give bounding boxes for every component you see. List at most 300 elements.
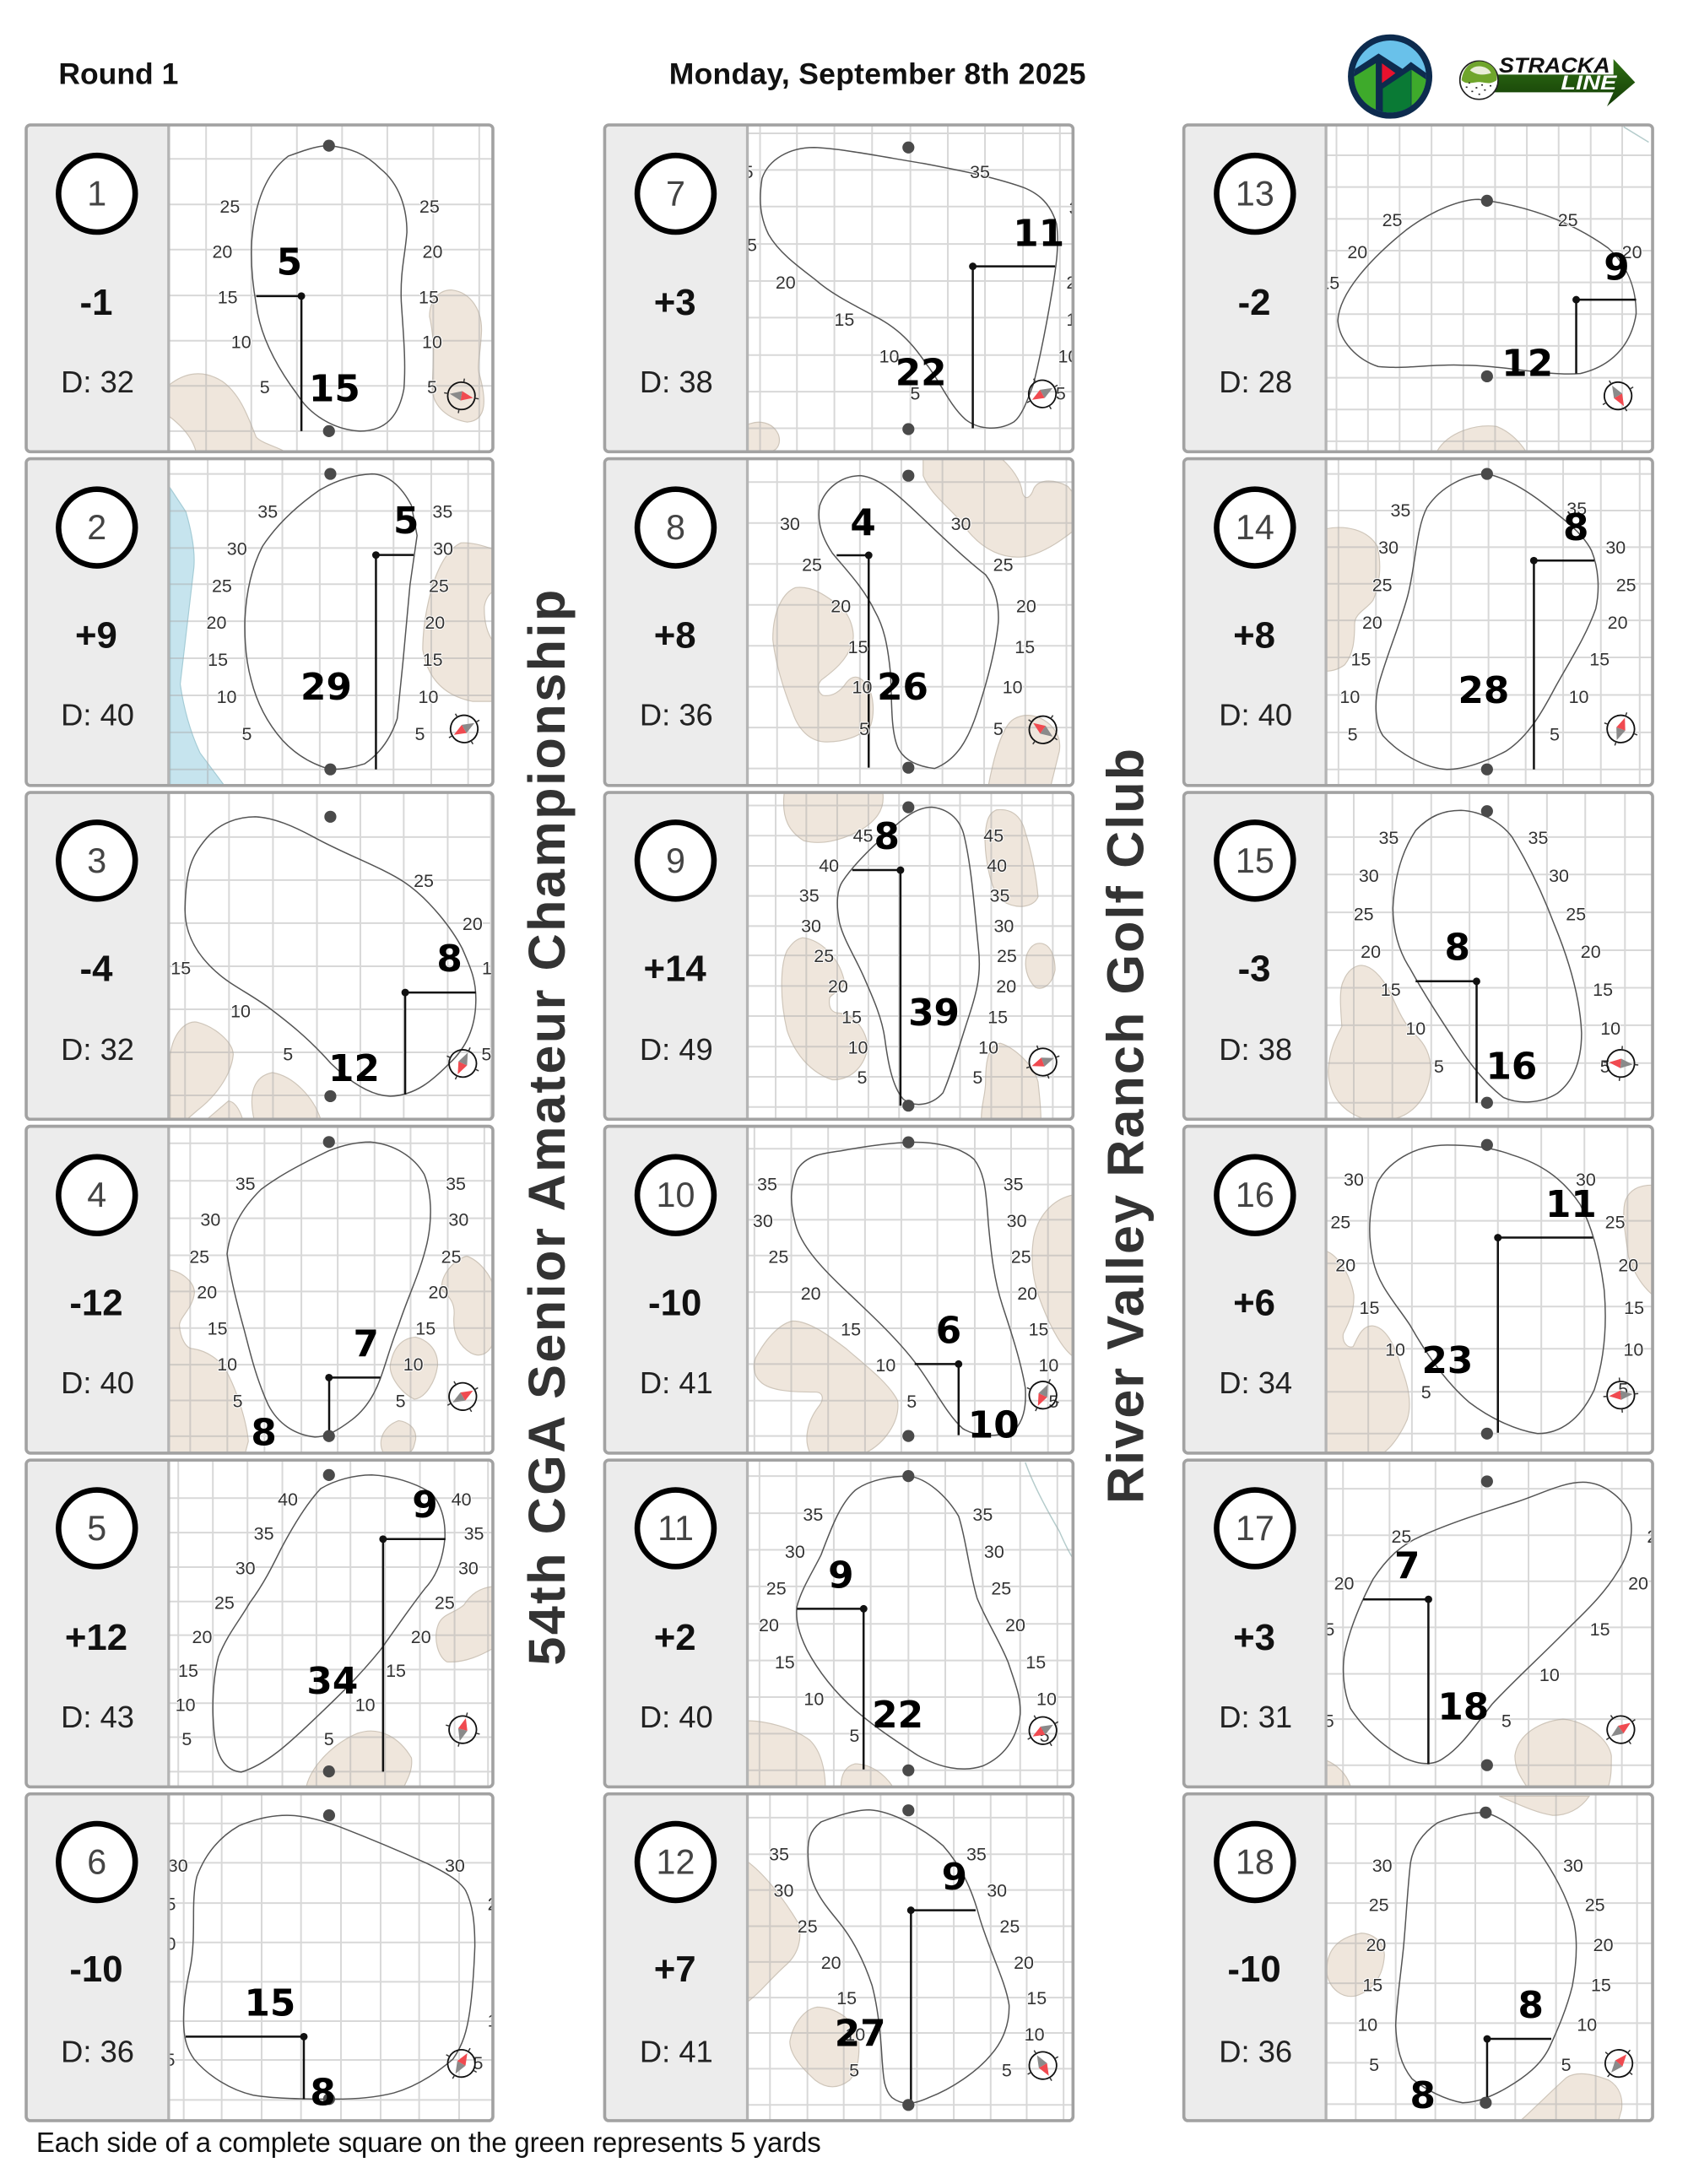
hole number 12: [637, 1824, 714, 1900]
yardage labels: 25: [991, 1578, 1011, 1598]
yardage labels: 5: [1040, 1726, 1050, 1746]
compass: [449, 713, 479, 744]
depth: D: 41: [640, 1365, 713, 1400]
yardage labels: 20: [1622, 242, 1642, 262]
hole number 15: [1216, 822, 1293, 899]
pins and hole location: [1480, 1807, 1491, 2109]
depth: D: 36: [61, 2035, 134, 2069]
yardage labels: 15: [170, 959, 191, 979]
yardage labels: 5: [165, 2050, 176, 2070]
yardage labels: 15: [1014, 637, 1035, 657]
green map: [744, 1121, 1079, 1457]
pins and hole location: [902, 142, 977, 435]
score: +12: [65, 1617, 127, 1658]
distance numbers: 7: [353, 1323, 379, 1366]
logo: Stracka Line arrow: LINE: [1561, 72, 1618, 95]
compass: [446, 1047, 479, 1080]
yardage labels: 25: [441, 1247, 462, 1268]
yardage labels: 40: [987, 856, 1007, 876]
yardage labels: 25: [993, 555, 1014, 576]
yardage labels: 30: [1069, 198, 1090, 219]
yardage labels: 25: [1372, 575, 1393, 595]
yardage labels: 20: [1014, 1953, 1034, 1973]
yardage labels: 10: [176, 1695, 196, 1716]
depth: D: 41: [640, 2035, 713, 2069]
yardage labels: 15: [834, 310, 854, 330]
yardage labels: 35: [733, 162, 754, 182]
distance numbers: 18: [1437, 1686, 1489, 1729]
hole number 7: 7: [666, 175, 685, 214]
yardage labels: 35: [970, 162, 990, 182]
yardage labels: 5: [1421, 1382, 1431, 1403]
green map: [1325, 787, 1657, 1123]
yardage labels: 5: [849, 1726, 859, 1746]
distance numbers: 22: [872, 1694, 923, 1737]
yardage labels: 25: [1566, 905, 1586, 925]
yardage labels: 10: [1339, 687, 1360, 707]
compass: [1602, 1045, 1640, 1083]
distance numbers: 5: [393, 500, 419, 543]
yardage labels: 10: [230, 1002, 251, 1022]
yardage labels: 20: [197, 1282, 217, 1302]
yardage labels: 45: [983, 825, 1004, 846]
yardage labels: 30: [774, 1881, 793, 1901]
yardage labels: 15: [178, 1661, 198, 1681]
hole number 18: 18: [1236, 1842, 1274, 1881]
green map: [744, 1792, 1079, 2123]
hole number 5: [58, 1490, 135, 1566]
yardage labels: 30: [227, 538, 247, 559]
yardage labels: 30: [1378, 538, 1399, 558]
yardage labels: 35: [446, 1174, 466, 1194]
distance numbers: 15: [309, 367, 360, 410]
yardage labels: 35: [990, 886, 1009, 906]
pins and hole location: [1481, 195, 1580, 382]
distance numbers: [1394, 1545, 1489, 1729]
yardage labels: 20: [1628, 1573, 1648, 1593]
yardage labels: 35: [803, 1505, 823, 1525]
distance numbers: [279, 248, 358, 402]
distance numbers: 16: [1485, 1045, 1537, 1088]
hole number 14: [1216, 489, 1293, 566]
yardage labels: 30: [168, 1856, 188, 1876]
score: -4: [80, 948, 113, 989]
yardage labels: 15: [1591, 1975, 1611, 1995]
green map: [165, 1122, 496, 1458]
yardage labels: 25: [766, 1578, 787, 1598]
yardage labels: 25: [768, 1247, 788, 1268]
score: +6: [1233, 1283, 1275, 1324]
yardage labels: 10: [879, 346, 900, 366]
compass: [1594, 2039, 1643, 2088]
score: -10: [648, 1283, 701, 1324]
hole number 17: 17: [1236, 1509, 1274, 1548]
yardage labels: 30: [433, 538, 453, 559]
yardage labels: 15: [1590, 1619, 1610, 1640]
yardage labels: 15: [482, 959, 502, 979]
yardage labels: 15: [841, 1008, 862, 1028]
yardage labels: 10: [422, 332, 442, 352]
yardage labels: 10: [403, 1354, 424, 1375]
yardage labels: 35: [799, 886, 820, 906]
compass: [447, 1381, 479, 1413]
pins and hole location: [860, 1470, 914, 1776]
yardage labels: 15: [1026, 1988, 1047, 2008]
distance numbers: 27: [835, 2013, 886, 2056]
distance numbers: 8: [310, 2072, 336, 2115]
panel: hole 17: [1184, 1454, 1667, 1790]
yardage labels: [1354, 828, 1620, 1077]
compass: [1596, 1706, 1645, 1754]
yardage labels: 15: [841, 1320, 861, 1340]
yardage labels: 30: [458, 1558, 479, 1578]
panel: hole 3: [26, 792, 502, 1123]
yardage labels: 10: [355, 1695, 376, 1716]
yardage labels: 20: [776, 273, 796, 293]
yardage labels: 30: [445, 1856, 465, 1876]
green map: [166, 792, 502, 1123]
yardage labels: 25: [1369, 1895, 1389, 1916]
yardage labels: 35: [1391, 500, 1410, 521]
yardage labels: 20: [463, 914, 483, 934]
panel: hole 15: [1184, 787, 1657, 1123]
distance numbers: 6: [936, 1310, 961, 1353]
yardage labels: 20: [1066, 273, 1086, 293]
green map: [166, 456, 498, 792]
yardage labels: 20: [1005, 1615, 1025, 1635]
pins and hole location: [323, 1469, 387, 1777]
yardage labels: 5: [859, 719, 869, 739]
vertical title: golf club: River Valley Ranch Golf Club: [1097, 749, 1155, 1504]
yardage labels: 10: [852, 678, 872, 698]
distance numbers: 8: [1563, 506, 1588, 549]
yardage labels: 25: [212, 576, 232, 596]
pins and hole location: [1481, 1139, 1501, 1440]
distance numbers: [895, 212, 1064, 395]
yardage labels: 25: [419, 197, 440, 217]
yardage labels: 30: [753, 1211, 773, 1231]
yardage labels: [1357, 1856, 1614, 2075]
distance numbers: [936, 1310, 1020, 1446]
hole number 13: 13: [1236, 175, 1274, 214]
yardage labels: 10: [1539, 1665, 1560, 1685]
yardage labels: 30: [1605, 538, 1626, 558]
panel: hole 14: [1184, 456, 1657, 792]
yardage labels: 5: [414, 724, 425, 744]
yardage labels: 25: [214, 1592, 235, 1613]
yardage labels: 5: [993, 719, 1004, 739]
distance numbers: [874, 815, 960, 1035]
green map: [744, 1456, 1079, 1792]
yardage labels: 15: [1315, 1619, 1334, 1640]
yardage labels: 35: [1004, 1175, 1024, 1195]
distance numbers: 34: [306, 1660, 358, 1703]
hole number 8: 8: [666, 508, 685, 547]
yardage labels: 15: [1589, 650, 1610, 670]
panel: hole 4: [26, 1122, 496, 1458]
yardage labels: 15: [1624, 1298, 1644, 1318]
hole number 9: [637, 822, 714, 899]
yardage labels: [170, 1858, 491, 2069]
yardage labels: 30: [987, 1881, 1007, 1901]
yardage labels: 20: [759, 1615, 779, 1635]
yardage labels: 25: [488, 1895, 508, 1915]
score: +14: [644, 948, 706, 989]
yardage labels: 40: [819, 856, 839, 876]
yardage labels: 30: [780, 514, 800, 534]
depth: D: 40: [61, 698, 134, 733]
yardage labels: [799, 825, 1017, 1088]
depth: D: 40: [640, 1700, 713, 1734]
yardage labels: 10: [1036, 1689, 1057, 1710]
hole number 16: [1216, 1157, 1293, 1234]
green map: [1315, 1454, 1667, 1790]
distance numbers: [850, 501, 928, 709]
yardage labels: 30: [1359, 866, 1379, 886]
hole number 12: 12: [657, 1842, 695, 1881]
yardage labels: 25: [1382, 210, 1403, 230]
distance numbers: 15: [244, 1982, 295, 2025]
yardage labels: 15: [1381, 980, 1401, 1000]
yardage labels: 35: [972, 1505, 993, 1525]
yardage labels: 20: [1347, 242, 1367, 262]
yardage labels: 10: [1039, 1355, 1058, 1376]
green map: [170, 1796, 491, 2120]
distance numbers: [1444, 927, 1537, 1088]
depth: D: 40: [61, 1365, 134, 1400]
yardage labels: 35: [257, 502, 278, 522]
yardage labels: 30: [448, 1210, 468, 1230]
green map: [165, 121, 494, 452]
pins and hole location: [865, 470, 914, 774]
distance numbers: 8: [1518, 1984, 1544, 2027]
distance numbers: 29: [300, 666, 352, 709]
yardage labels: 25: [1011, 1247, 1031, 1268]
yardage labels: 20: [207, 613, 226, 633]
yardage labels: 15: [1350, 650, 1371, 670]
distance numbers: [309, 1490, 436, 1695]
yardage labels: 30: [235, 1558, 256, 1578]
distance numbers: [333, 943, 461, 1081]
yardage labels: 10: [848, 1037, 868, 1057]
panel: hole 9: [604, 789, 1079, 1125]
yardage labels: 25: [802, 555, 822, 576]
compass: [1019, 705, 1068, 754]
hole number 1: 1: [87, 175, 106, 214]
yardage labels: 5: [1324, 1711, 1334, 1732]
compass: [1020, 1372, 1066, 1419]
yardage labels: 20: [1362, 613, 1382, 633]
logo: Stracka Line arrow: [1460, 54, 1635, 106]
yardage labels: 15: [1066, 310, 1086, 330]
yardage labels: 5: [1348, 724, 1358, 744]
green map: [1325, 456, 1657, 792]
distance numbers: [1458, 506, 1588, 712]
distance numbers: [1422, 1183, 1597, 1382]
yardage labels: 30: [1563, 1856, 1583, 1876]
yardage labels: 5: [849, 2060, 859, 2080]
yardage labels: 15: [208, 1318, 228, 1338]
yardage labels: 35: [464, 1524, 484, 1544]
yardage labels: 20: [996, 976, 1016, 997]
hole number 11: 11: [657, 1509, 694, 1548]
yardage labels: 30: [1344, 1170, 1364, 1190]
distance numbers: 8: [1409, 2074, 1436, 2117]
yardage labels: 25: [1558, 210, 1578, 230]
yardage labels: 30: [984, 1542, 1004, 1562]
panel: hole 8: [604, 454, 1079, 790]
yardage labels: [759, 1505, 1057, 1746]
yardage labels: 5: [260, 377, 270, 397]
yardage labels: 45: [853, 825, 874, 846]
score: -10: [1227, 1949, 1281, 1990]
yardage labels: 10: [978, 1037, 998, 1057]
yardage labels: 5: [242, 724, 252, 744]
score: -1: [80, 282, 112, 323]
yardage labels: 5: [1434, 1057, 1444, 1077]
yardage labels: 5: [324, 1729, 334, 1749]
yardage labels: 35: [966, 1845, 987, 1865]
distance numbers: [303, 506, 417, 700]
yardage labels: 25: [414, 871, 434, 891]
hole number 7: [637, 155, 714, 232]
yardage labels: 25: [219, 197, 240, 217]
yardage labels: 20: [801, 1284, 821, 1304]
score: +9: [75, 615, 117, 657]
yardage labels: 20: [1593, 1935, 1614, 1955]
yardage labels: 25: [997, 946, 1017, 966]
yardage labels: 10: [1025, 2025, 1045, 2045]
score: +8: [1233, 615, 1275, 657]
hole number 14: 14: [1236, 508, 1274, 547]
hole number 17: [1216, 1490, 1293, 1566]
green map: [749, 127, 1072, 451]
depth: D: 49: [640, 1032, 713, 1067]
yardage labels: 30: [1007, 1211, 1027, 1231]
yardage labels: 15: [1360, 1298, 1379, 1318]
yardage labels: 5: [1002, 2060, 1012, 2080]
yardage labels: 15: [423, 650, 443, 670]
yardage labels: 5: [1600, 1057, 1610, 1077]
yardage labels: 5: [1369, 2055, 1379, 2075]
depth: D: 32: [61, 365, 134, 399]
yardage labels: 20: [1335, 1256, 1355, 1276]
distance numbers: [1409, 1984, 1544, 2117]
yardage labels: 35: [432, 502, 452, 522]
distance numbers: 22: [895, 352, 947, 395]
yardage labels: 10: [419, 687, 439, 707]
yardage labels: 5: [283, 1045, 293, 1065]
hole number 4: 4: [87, 1176, 106, 1214]
yardage labels: 25: [156, 1895, 176, 1915]
yardage labels: 25: [429, 576, 449, 596]
score: -2: [1238, 282, 1270, 323]
yardage labels: 5: [473, 2053, 484, 2073]
panel: hole 10: [604, 1121, 1079, 1457]
compass: [446, 2047, 477, 2079]
distance numbers: 23: [1422, 1339, 1473, 1382]
yardage labels: 35: [757, 1175, 777, 1195]
logo: River Valley Ranch mountain badge: [1348, 35, 1433, 119]
distance numbers: 8: [251, 1411, 277, 1454]
hole number 11: [637, 1490, 714, 1566]
yardage labels: 35: [235, 1174, 256, 1194]
yardage labels: [1315, 1527, 1667, 1732]
yardage labels: 10: [217, 1354, 237, 1375]
yardage labels: 30: [1576, 1170, 1596, 1190]
yardage labels: 15: [419, 288, 439, 308]
yardage labels: 15: [218, 288, 238, 308]
green map: [165, 1458, 496, 1790]
hole number 5: 5: [87, 1509, 106, 1548]
depth: D: 34: [1219, 1365, 1292, 1400]
hole number 15: 15: [1236, 841, 1274, 880]
panel: hole 2: [26, 456, 498, 792]
depth: D: 40: [1219, 698, 1292, 733]
green map: [744, 454, 1079, 790]
compass: [1019, 370, 1066, 418]
heading: date: Monday, September 8th 2025: [669, 57, 1086, 91]
score: +3: [1233, 1617, 1275, 1658]
pins and hole location: [902, 1804, 915, 2111]
yardage labels: 25: [1392, 1527, 1411, 1547]
yardage labels: 20: [1017, 1284, 1037, 1304]
yardage labels: 5: [1561, 2055, 1572, 2075]
yardage labels: 5: [481, 1045, 491, 1065]
depth: D: 43: [61, 1700, 134, 1734]
hole number 4: [58, 1157, 135, 1234]
yardage labels: 15: [386, 1661, 406, 1681]
yardage labels: 20: [1618, 1256, 1638, 1276]
yardage labels: 20: [192, 1627, 212, 1647]
score: +8: [654, 615, 696, 657]
hole number 3: [58, 822, 135, 899]
yardage labels: 15: [1593, 980, 1613, 1000]
compass: [1599, 706, 1643, 751]
yardage labels: 10: [1058, 346, 1078, 366]
yardage labels: 25: [1616, 575, 1637, 595]
pins and hole location: [1473, 805, 1493, 1109]
yardage labels: 25: [189, 1247, 209, 1268]
yardage labels: 25: [435, 1592, 455, 1613]
yardage labels: 20: [1366, 1935, 1386, 1955]
pins and hole location: [324, 811, 409, 1102]
depth: D: 31: [1219, 1700, 1292, 1734]
yardage labels: [170, 871, 502, 1065]
yardage labels: 25: [798, 1916, 818, 1937]
yardage labels: 5: [910, 384, 920, 404]
pins and hole location: [300, 1809, 335, 2105]
yardage labels: 30: [1372, 1856, 1393, 1876]
pins and hole location: [298, 140, 335, 437]
yardage labels: 25: [1605, 1213, 1626, 1233]
yardage labels: 25: [999, 1916, 1020, 1937]
panel: hole 16: [1184, 1122, 1657, 1458]
yardage labels: 15: [987, 1008, 1008, 1028]
distance numbers: 9: [1604, 246, 1630, 289]
depth: D: 36: [640, 698, 713, 733]
yardage labels: 20: [428, 1282, 448, 1302]
hole number 10: [637, 1157, 714, 1234]
yardage labels: 25: [1647, 1527, 1667, 1547]
distance numbers: 9: [828, 1554, 854, 1597]
score: +3: [654, 282, 696, 323]
panel: hole 13: [1184, 118, 1657, 460]
yardage labels: 15: [415, 1318, 436, 1338]
distance numbers: [835, 1856, 967, 2056]
distance numbers: 9: [942, 1856, 967, 1899]
distance numbers: [248, 1988, 334, 2106]
